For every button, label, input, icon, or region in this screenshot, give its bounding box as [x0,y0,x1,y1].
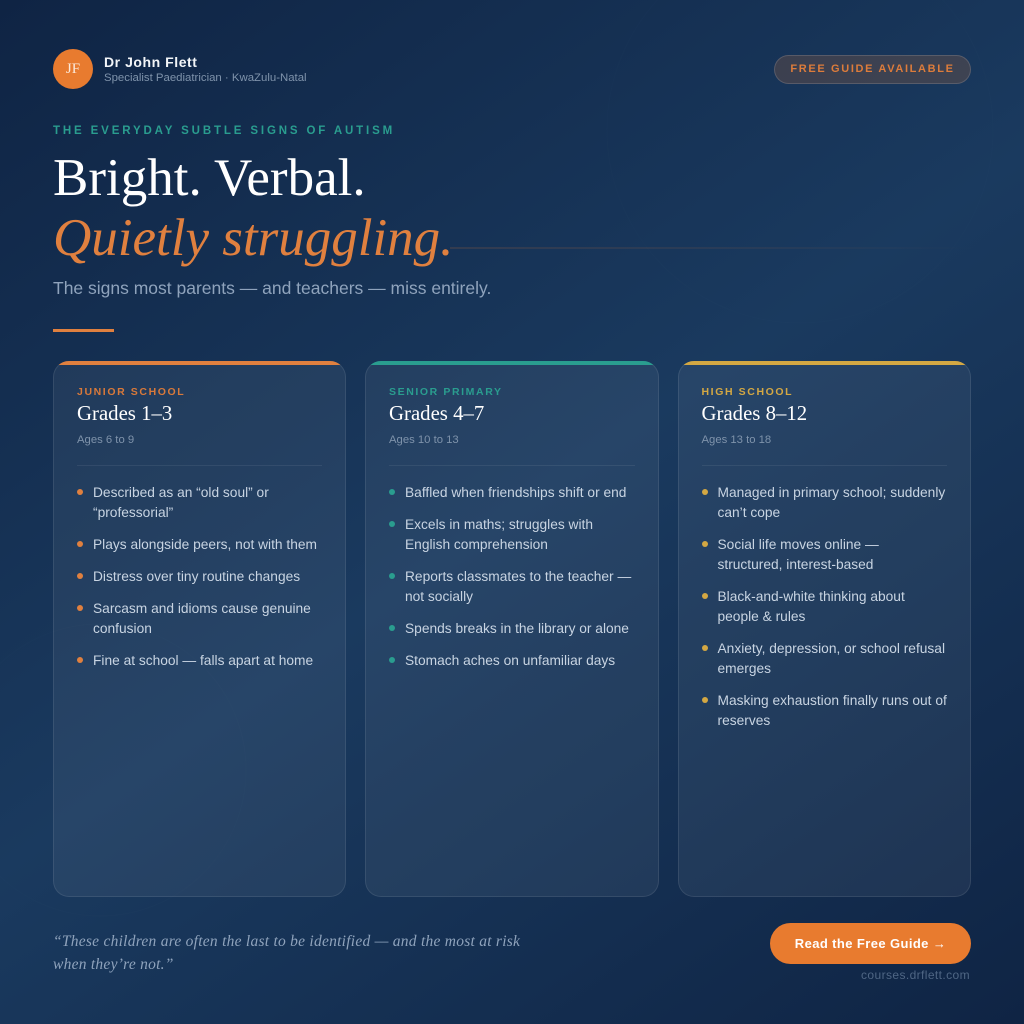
bullet list: Anxiety, depression, or school refusal [718,641,945,656]
bullet list: Excels in maths; struggles with [405,517,593,532]
bullet list [77,485,317,668]
ages: Ages 13 to 18 [702,434,771,446]
bullet list: Spends breaks in the library or alone [405,621,629,636]
level label: HIGH SCHOOL [702,386,793,398]
title [53,149,453,267]
bullet list: Plays alongside peers, not with them [93,537,317,552]
panel: senior primary [365,361,659,897]
bullet list: Sarcasm and idioms cause genuine [93,601,311,616]
button: read the free guide: Read the Free Guide → [795,936,946,951]
bullet list: “professorial” [93,505,173,520]
bullet list: Social life moves online — [718,537,879,552]
bullet list: English comprehension [405,537,548,552]
grade heading: Grades 8–12 [702,402,807,425]
badge: free guide [774,55,971,84]
panel: junior school [53,361,346,897]
bullet list [702,485,947,728]
bullet list: reserves [718,713,770,728]
footer quote [53,933,520,973]
eyebrow: THE EVERYDAY SUBTLE SIGNS OF AUTISM [53,125,395,137]
grade heading: Grades 1–3 [77,402,172,425]
panel: high school [678,361,971,897]
footer quote: when they’re not.” [53,956,174,973]
level label: JUNIOR SCHOOL [77,386,185,398]
bullet list: structured, interest-based [718,557,873,572]
footer url: courses.drflett.com [861,968,970,982]
title: Quietly struggling. [53,209,453,267]
author role: Specialist Paediatrician · KwaZulu-Natal [104,72,307,84]
bullet list [389,485,632,668]
bullet list: Masking exhaustion finally runs out of [718,693,947,708]
bullet list: Fine at school — falls apart at home [93,653,313,668]
bullet list: people & rules [718,609,805,624]
bullet list: can’t cope [718,505,780,520]
author name: Dr John Flett [104,54,197,70]
bullet list: not socially [405,589,473,604]
subtitle: The signs most parents — and teachers — miss entirely. [53,278,491,298]
title: Bright. Verbal. [53,149,366,207]
badge: free guide: FREE GUIDE AVAILABLE [790,63,955,75]
icon: JF avatar [53,49,93,89]
bullet list: Reports classmates to the teacher — [405,569,631,584]
bullet list: Managed in primary school; suddenly [718,485,945,500]
bullet list: Stomach aches on unfamiliar days [405,653,615,668]
bullet list: emerges [718,661,771,676]
icon: JF avatar: JF [66,61,80,77]
bullet list: Distress over tiny routine changes [93,569,300,584]
header: author [53,49,307,89]
bullet list: Described as an “old soul” or [93,485,269,500]
ages: Ages 10 to 13 [389,434,459,446]
footer quote: “These children are often the last to be identified — and the most at risk [53,933,520,950]
ages: Ages 6 to 9 [77,434,134,446]
bullet list: confusion [93,621,152,636]
grade heading: Grades 4–7 [389,402,484,425]
button: read the free guide [770,923,971,964]
bullet list: Baffled when friendships shift or end [405,485,626,500]
accent rule [53,329,114,332]
level label: SENIOR PRIMARY [389,386,503,398]
bullet list: Black-and-white thinking about [718,589,905,604]
